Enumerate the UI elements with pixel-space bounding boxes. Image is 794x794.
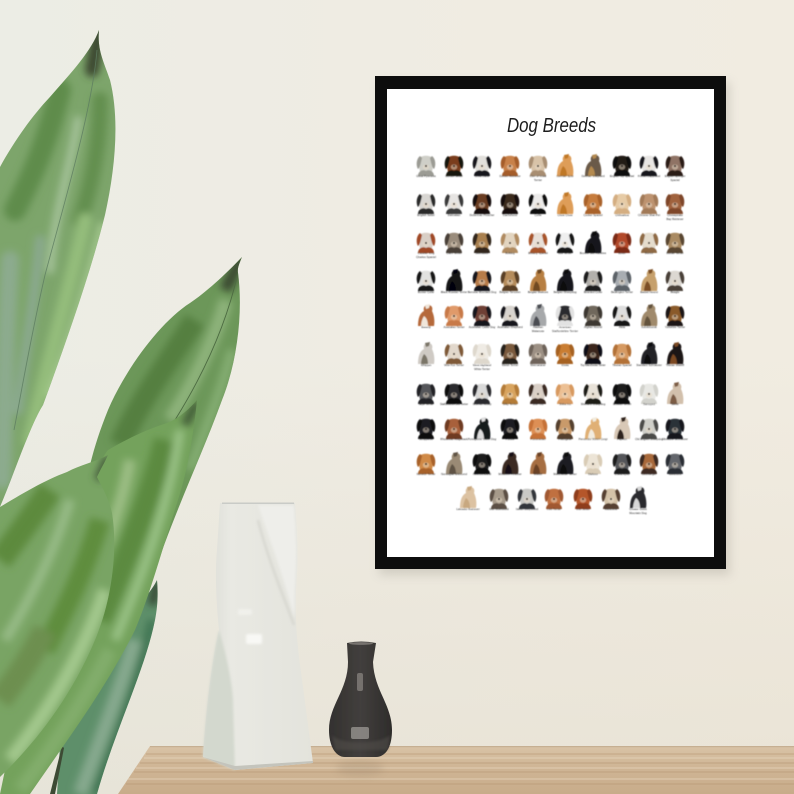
plant leaf: bottom right leaf xyxy=(57,580,158,794)
row 3 of breeds: Cairn Terrier xyxy=(446,251,462,255)
row 8 of breeds: Papillon xyxy=(617,437,627,441)
dark round vase xyxy=(329,642,392,757)
row 10 of breeds: Italian Greyhound xyxy=(516,507,538,511)
row 9 of breeds: Manchester Terrier xyxy=(553,472,577,476)
plant stem xyxy=(50,746,64,794)
row 6 of breeds: Welsh Terrier xyxy=(502,363,518,367)
row 9 of breeds: Lhasa Apso xyxy=(615,472,630,476)
row 2 of breeds: Chow Chow xyxy=(557,213,574,217)
row 10 of breeds: Greater Swiss xyxy=(629,507,647,511)
row 2 of breeds: Doberman Pinscher xyxy=(470,213,494,217)
row 6 of breeds: Whippet xyxy=(421,363,431,367)
row 7 of breeds xyxy=(417,382,683,406)
row 8 of breeds: Old English Sheepdog xyxy=(635,437,663,441)
row 8 of breeds: Pembroke Welsh Corgi xyxy=(579,437,608,441)
row 10 of breeds: Havanese xyxy=(605,507,618,511)
row 4 of breeds: Beagle xyxy=(671,290,680,294)
row 5 of breeds: Xoloitzcuintli xyxy=(641,325,657,329)
row 2 of breeds: Chinese Shar-Pei xyxy=(638,213,660,217)
row 9 of breeds: Keeshond xyxy=(669,472,682,476)
white twisted vase xyxy=(203,502,313,770)
row 5 of breeds: Yorkshire Terrier xyxy=(665,325,685,329)
row 5 of breeds: Alaskan xyxy=(533,325,543,329)
row 7 of breeds: Silky Terrier xyxy=(503,402,517,406)
row 10 of breeds: Irish Terrier xyxy=(547,507,561,511)
row 1 of breeds: Golden Retriever xyxy=(499,174,521,178)
row 7 of breeds: Samoyed xyxy=(643,402,655,406)
row 8 of breeds xyxy=(417,417,688,441)
row 6 of breeds: West Highland xyxy=(473,363,492,367)
row 5 of breeds xyxy=(418,304,685,333)
row 2 of breeds: Cocker Spaniel xyxy=(584,213,603,217)
row 5 of breeds: American xyxy=(559,325,571,329)
row 4 of breeds: Belgian Malinois xyxy=(528,290,549,294)
row 7 of breeds: Scottish Terrier xyxy=(613,402,631,406)
row 4 of breeds: Bedlington Terrier xyxy=(611,290,633,294)
row 1 of breeds: German Spitz xyxy=(556,174,574,178)
row 10 of breeds: Irish Wolfhound xyxy=(489,507,509,511)
row 4 of breeds: Bearded Collie xyxy=(584,290,603,294)
plant leaf: front middle leaf xyxy=(0,395,200,794)
row 4 of breeds: Black Russian Terrier xyxy=(441,290,467,294)
row 3 of breeds: Border Terrier xyxy=(666,251,684,255)
row 7 of breeds: Shetland Sheepdog xyxy=(581,402,606,406)
row 4 of breeds: Basset Hound xyxy=(640,290,658,294)
row 2 of breeds: Chesapeake xyxy=(667,213,683,217)
row 8 of breeds: Schipperke xyxy=(419,437,433,441)
frame xyxy=(375,76,726,569)
row 5 of breeds: Akita xyxy=(619,325,626,329)
row 5 of breeds: Australian Shepherd xyxy=(497,325,523,329)
row 2 of breeds: English Setter xyxy=(417,213,435,217)
row 2 of breeds xyxy=(417,192,684,221)
row 3 of breeds: Bouvier des Flandres xyxy=(580,251,607,255)
row 10 of breeds xyxy=(456,486,647,515)
row 4 of breeds xyxy=(417,269,684,294)
row 1 of breeds: Gordon Setter xyxy=(445,174,463,178)
row 10 of breeds: Mountain Dog xyxy=(629,511,647,515)
row 9 of breeds: Newfoundland xyxy=(473,472,491,476)
row 9 of breeds: Leonberger xyxy=(642,472,656,476)
row 1 of breeds: Great Pyrenees xyxy=(416,174,436,178)
row 8 of breeds: Portuguese Water Dog xyxy=(468,437,497,441)
row 7 of breeds: Shih Tzu xyxy=(532,402,544,406)
row 9 of breeds: Mastiff xyxy=(534,472,542,476)
row 9 of breeds: Maltese xyxy=(588,472,598,476)
row 6 of breeds: Weimaraner xyxy=(530,363,546,367)
row 1 of breeds: Spaniel xyxy=(670,178,680,182)
row 4 of breeds: Border Collie xyxy=(418,290,435,294)
row 5 of breeds: Basenji xyxy=(421,325,431,329)
row 8 of breeds: Pekingese xyxy=(558,437,572,441)
row 6 of breeds: Standard Schnauzer xyxy=(636,363,662,367)
row 3 of breeds: Boxer xyxy=(618,251,626,255)
row 4 of breeds: Belgian Tervuren xyxy=(500,290,521,294)
row 2 of breeds: Dalmatian xyxy=(448,213,461,217)
row 1 of breeds: Glen of Imaal xyxy=(530,174,547,178)
row 6 of breeds: White Terrier xyxy=(474,367,490,371)
row 2 of breeds: Collie xyxy=(534,213,542,217)
row 6 of breeds xyxy=(418,342,684,371)
row 9 of breeds: Norwich Terrier xyxy=(417,472,435,476)
row 10 of breeds: Labrador Retriever xyxy=(456,507,480,511)
row 5 of breeds: Australian Cattle Dog xyxy=(469,325,496,329)
row 1 of breeds: Great Dane xyxy=(475,174,490,178)
row 7 of breeds: Staffordshire Bull Terrier xyxy=(440,402,468,406)
row 3 of breeds: Cavalier King xyxy=(418,251,435,255)
row 3 of breeds xyxy=(416,231,684,259)
plant leaf: top large leaf xyxy=(0,30,116,507)
wooden table xyxy=(118,746,794,794)
title: Dog Breeds xyxy=(507,115,596,137)
row 5 of breeds: Malamute xyxy=(532,329,545,333)
plant leaf: left foreground leaf xyxy=(0,455,114,777)
row 1 of breeds: English Springer xyxy=(665,174,685,178)
row 7 of breeds: Skye Terrier xyxy=(419,402,434,406)
row 3 of breeds: Bull Terrier xyxy=(558,251,572,255)
row 1 of breeds: Finnish Lapphund xyxy=(638,174,661,178)
row 5 of breeds: Australian Terrier xyxy=(443,325,465,329)
row 3 of breeds: Charles Spaniel xyxy=(416,255,436,259)
row 2 of breeds: Bay Retriever xyxy=(667,217,684,221)
row 7 of breeds: Shiba Inu xyxy=(559,402,571,406)
row 6 of breeds: Vizsla xyxy=(561,363,569,367)
row 2 of breeds: Dachshund xyxy=(503,213,518,217)
row 6 of breeds: Tibetan Spaniel xyxy=(612,363,632,367)
poster in black frame xyxy=(375,76,726,569)
row 9 of breeds: Miniature Pinscher xyxy=(498,472,522,476)
row 3 of breeds: Bullmastiff xyxy=(476,251,489,255)
row 5 of breeds: Afghan Hound xyxy=(584,325,602,329)
row 3 of breeds: Bulldog xyxy=(505,251,515,255)
row 8 of breeds: Poodle xyxy=(506,437,515,441)
row 3 of breeds: Borzoi xyxy=(645,251,653,255)
picture frame shadow xyxy=(379,82,730,575)
row 6 of breeds: Wire Fox Terrier xyxy=(444,363,464,367)
row 7 of breeds: Siberian Husky xyxy=(473,402,492,406)
row 9 of breeds xyxy=(417,452,684,476)
row 1 of breeds: English Toy Spaniel xyxy=(610,174,635,178)
row 5 of breeds: Staffordshire Terrier xyxy=(552,329,578,333)
row 9 of breeds: Norwegian Elkhound xyxy=(441,472,467,476)
row 8 of breeds: Miniature Schnauzer xyxy=(662,437,688,441)
row 8 of breeds: Pomeranian xyxy=(530,437,546,441)
row 6 of breeds: Toy Manchester Terrier xyxy=(580,363,606,367)
row 8 of breeds: Rhodesian Ridgeback xyxy=(440,437,468,441)
row 7 of breeds: Saluki xyxy=(671,402,679,406)
row 3 of breeds: Brittany Spaniel xyxy=(528,251,548,255)
row 10 of breeds: Irish Setter xyxy=(576,507,590,511)
breed grid xyxy=(416,154,688,515)
plant leaf: rear middle leaf xyxy=(90,257,242,550)
row 2 of breeds: Chihuahua xyxy=(615,213,629,217)
row 6 of breeds: Tibetan Mastiff xyxy=(666,363,684,367)
row 4 of breeds: Belgian Sheepdog xyxy=(554,290,577,294)
row 1 of breeds: Terrier xyxy=(534,178,542,182)
poster paper xyxy=(387,89,714,557)
row 1 of breeds: German Shepherd xyxy=(581,174,605,178)
row 4 of breeds: Bernese Mountain Dog xyxy=(468,290,497,294)
row 1 of breeds xyxy=(416,154,685,182)
